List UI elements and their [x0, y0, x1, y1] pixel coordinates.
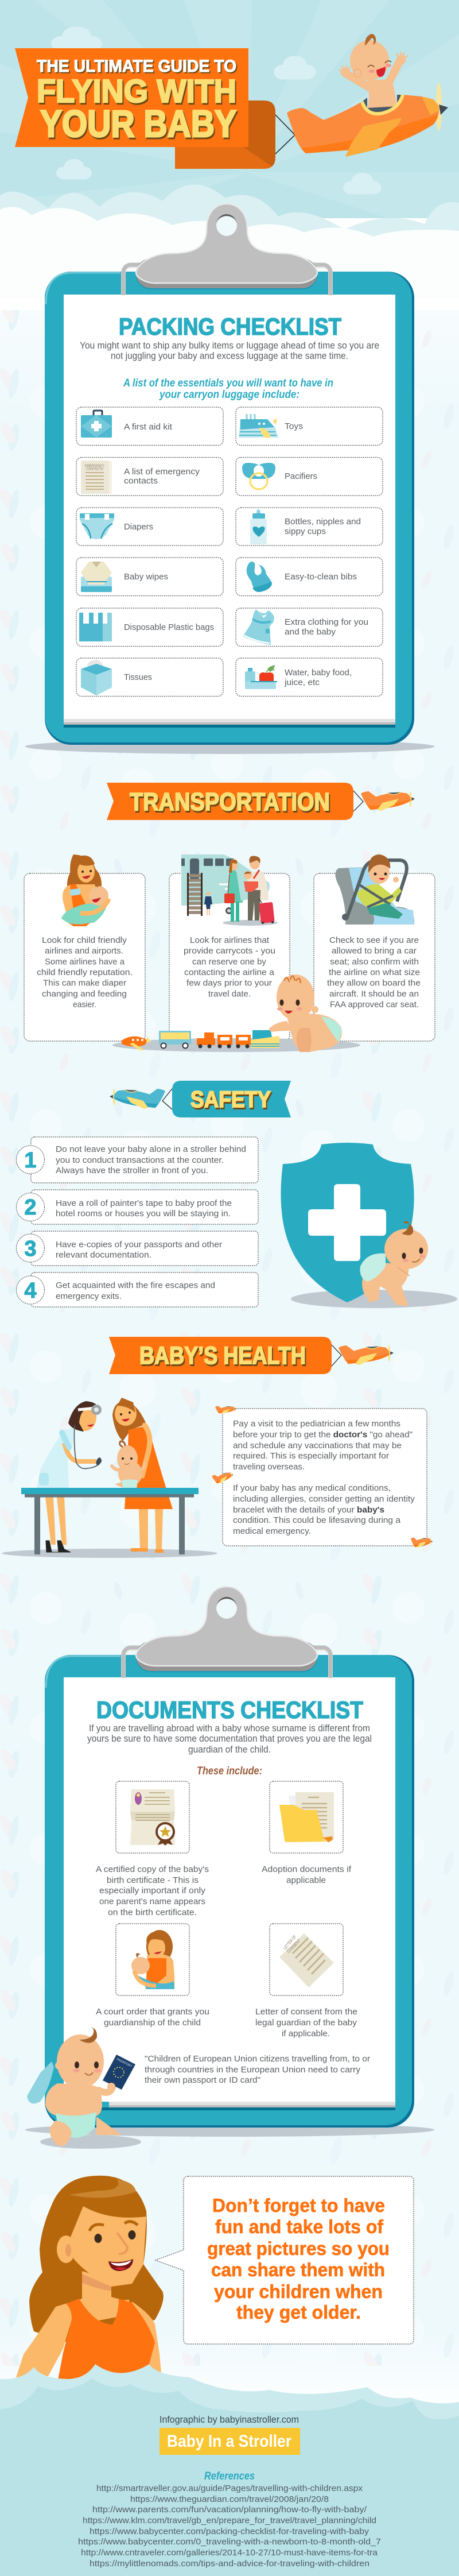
sky background [0, 0, 459, 356]
speech text: can share them with [211, 2259, 385, 2280]
illustration: mother feeding baby [61, 854, 109, 926]
safety item 2: Have a roll of painter's tape to baby proof the [56, 1198, 232, 1208]
doc card text: letter: Letter of consent from the [255, 2007, 357, 2017]
safety item 2: hotel rooms or houses you will be staying in. [56, 1209, 231, 1219]
health text box: before your trip to get the doctor's "go ahead" [233, 1430, 413, 1440]
doc card text: court order: A court order that grants you [96, 2007, 209, 2017]
fringe highlight [69, 2179, 136, 2198]
item: bibs [236, 558, 383, 596]
number badge 3: 3 [24, 1237, 37, 1261]
safety item 1: you to conduct transactions at the counter. [56, 1155, 224, 1165]
mother in teal [224, 859, 243, 922]
logo badge [160, 2428, 300, 2455]
tow lines and plane: transportation [353, 791, 415, 811]
icon: folder [279, 1792, 334, 1842]
card: child friendly airlines: easier. [73, 1000, 96, 1009]
hand [107, 2083, 115, 2091]
heading: packing checklist: PACKING CHECKLIST [119, 313, 341, 340]
card: child friendly airlines: changing and feeding [42, 989, 127, 999]
speech text: great pictures so you [207, 2238, 390, 2259]
head [57, 2035, 104, 2088]
card: car seat: the airline on what size [329, 968, 420, 977]
passport [103, 2055, 135, 2090]
icon: letter: CONSENT [286, 1938, 302, 1954]
illustration: family at airplane [181, 854, 278, 926]
toy train [197, 1032, 251, 1046]
item: water and food: juice, etc [284, 678, 320, 687]
heading: documents checklist: DOCUMENTS CHECKLIST [96, 1696, 363, 1723]
european union quote: their own passport or ID card" [145, 2075, 260, 2085]
speech bubble [155, 2176, 414, 2344]
safety item 3: relevant documentation. [56, 1250, 151, 1260]
baby on table [112, 1441, 145, 1492]
european union quote: through countries in the European Union need to carry [145, 2065, 361, 2075]
doc card: letter of consent [270, 1924, 343, 1995]
icon: food and water [245, 665, 277, 689]
top cloud layers [0, 184, 459, 310]
baby face [368, 61, 391, 77]
health text box: required. This is especially important for [233, 1451, 389, 1461]
neck shadow [82, 2274, 111, 2291]
doc card text: adoption: applicable [286, 1875, 326, 1885]
references list: http://smartraveller.gov.au/guide/Pages/travelling-with-children.aspx [96, 2484, 363, 2493]
paper [64, 1677, 395, 2102]
doc card text: birth certificate: on the birth certificate. [108, 1908, 197, 1917]
doc card text: adoption [262, 1865, 352, 1885]
icon: wipes [81, 562, 112, 592]
banner: safety [172, 1081, 291, 1117]
icon: letter [279, 1933, 334, 1987]
item: pacifiers [236, 457, 383, 496]
icon: contacts paper [81, 461, 112, 494]
icon: contacts paper: EMERGENCY [85, 465, 104, 468]
title: THE ULTIMATE GUIDE TO [37, 57, 236, 76]
intro text: not juggling your baby and excess luggage at the same time. [111, 350, 348, 361]
references list: https://www.babycenter.com/0_traveling-with-a-newborn-to-8-month-old_7 [78, 2537, 381, 2547]
doc card text: birth certificate: A certified copy of the baby's [96, 1865, 209, 1874]
clip 2 [123, 1587, 330, 1689]
arm [99, 2087, 112, 2092]
icon: plastic bag [79, 613, 112, 641]
card: car seat: they allow on board the [327, 978, 421, 988]
crawling baby [269, 974, 342, 1052]
references heading: References [204, 2470, 255, 2482]
card: child friendly airlines: airlines and airports. [45, 946, 123, 956]
wing [345, 118, 401, 157]
small clouds [51, 26, 382, 195]
item: diapers [76, 508, 223, 546]
floor shadow [2, 1549, 217, 1558]
father with baby [244, 856, 269, 920]
card: child friendly airlines: Look for child friendly [42, 935, 127, 945]
banner back fold [175, 100, 275, 169]
mother [112, 1398, 173, 1553]
shadow under shield [291, 1290, 457, 1308]
safety item 3 [16, 1231, 258, 1266]
number badge 2: 2 [24, 1196, 37, 1220]
references list: https://www.babycenter.com/packing-checklist-for-traveling-with-baby [90, 2527, 369, 2536]
card: carrycots: can reserve one by [192, 957, 267, 966]
plane with baby [287, 34, 448, 157]
safety item 3: Have e-copies of your passports and other [56, 1240, 222, 1250]
doc card: court order [116, 1924, 189, 1995]
subheading: your carryon luggage include: [159, 389, 299, 401]
shadow under clipboard 1 [25, 739, 435, 754]
card: carrycots: provide carrycots - you [184, 946, 275, 956]
credit line: Infographic by babyinastroller.com [160, 2414, 299, 2425]
card: child friendly airlines: Some airlines have a [45, 957, 125, 966]
toy boat [251, 1030, 279, 1048]
item: bibs: Easy-to-clean bibs [285, 573, 357, 582]
doc card text: birth certificate: especially important if only [99, 1886, 206, 1896]
item: emergency contacts: contacts [124, 477, 158, 486]
number badge 1 [16, 1146, 45, 1174]
icon: contacts paper: CONTACTS [86, 467, 103, 471]
floor shadow under baby [40, 2135, 141, 2149]
board [45, 1655, 414, 2128]
safety item 1 [16, 1137, 258, 1183]
health text box: traveling overseas. [233, 1462, 305, 1472]
references list: http://www.cntraveler.com/galleries/2014-10-27/10-must-have-items-for-tra [81, 2548, 378, 2558]
ear [55, 2061, 63, 2070]
exam table [21, 1488, 199, 1554]
toy [27, 2061, 54, 2103]
shadow under toys [112, 1038, 360, 1052]
banner: baby's health: BABY’S HEALTH [139, 1342, 306, 1370]
illustration: mother with baby [131, 1930, 174, 1989]
item: clothing: and the baby [285, 628, 336, 637]
logo badge: Baby In a Stroller [167, 2432, 291, 2451]
arms and chest skin [16, 2271, 161, 2377]
intro text: You might want to ship any bulky items or luggage ahead of time so you are [80, 340, 379, 351]
health text box [223, 1409, 427, 1546]
health text box: and schedule any vaccinations that may be [233, 1441, 402, 1451]
brows, eyes, nose and mouth [90, 2222, 138, 2271]
card: carrycots [169, 854, 290, 1041]
card: car seat [314, 854, 435, 1041]
tow lines [275, 115, 295, 154]
health text box: bracelet with the details of your baby's [233, 1505, 384, 1515]
baby ear [353, 69, 361, 77]
doc card text: letter [255, 2007, 357, 2039]
baby hands [340, 52, 408, 76]
documents intro: yours be sure to have some documentation that proves you are the legal [87, 1733, 372, 1744]
item: emergency contacts [76, 457, 223, 496]
card: child friendly airlines [24, 854, 145, 1041]
speech text: they get older. [236, 2302, 361, 2323]
card: car seat: Check to see if you are [329, 935, 419, 945]
european union quote [145, 2054, 370, 2085]
item: tissues [76, 658, 223, 696]
doctor [37, 1401, 102, 1552]
icon: dress [243, 609, 274, 645]
right arm [132, 2302, 161, 2374]
documents intro: guardian of the child. [188, 1744, 271, 1755]
toy plane [122, 1036, 151, 1050]
icon: certificate [130, 1789, 175, 1846]
icon: letter: LETTER OF [282, 1934, 297, 1951]
woman at the end [16, 2176, 164, 2383]
card: car seat: seat; also confirm with [330, 957, 419, 966]
item: clothing: Extra clothing for you [285, 618, 368, 627]
item: toys: Toys [285, 422, 303, 431]
clipboard: documents checklist [45, 1655, 414, 2128]
documents intro: If you are travelling abroad with a baby whose surname is different from [89, 1723, 370, 1734]
item: clothing [236, 608, 383, 647]
references list: https://www.theguardian.com/travel/2008/jan/20/8 [130, 2494, 329, 2504]
item: emergency contacts: A list of emergency [124, 467, 200, 477]
header banner [15, 48, 275, 169]
baby arms [348, 62, 399, 89]
shadow under clipboard 2 [25, 2123, 435, 2137]
baby curl [365, 34, 376, 46]
flight attendant [204, 891, 212, 915]
title [37, 57, 236, 145]
number badge 4: 4 [24, 1279, 37, 1303]
doc card text: letter: legal guardian of the baby [255, 2018, 357, 2028]
ear [57, 2235, 75, 2263]
banner: transportation [107, 783, 353, 820]
item: plastic bags: Disposable Plastic bags [124, 623, 214, 632]
item: baby wipes [76, 558, 223, 596]
speech text: your children when [214, 2281, 383, 2302]
health text box: condition. This could be lifesaving during a [233, 1515, 401, 1525]
card: car seat: FAA approved car seat. [330, 1000, 419, 1009]
safety item 1: Always have the stroller in front of you. [56, 1166, 208, 1175]
doc card text: birth certificate [96, 1865, 209, 1917]
subheading: these include: These include: [197, 1765, 262, 1777]
red suitcase [259, 899, 275, 924]
banner: safety: SAFETY [190, 1087, 271, 1112]
title: FLYING WITH [37, 73, 236, 110]
subheading [123, 377, 333, 401]
doc card text: birth certificate: birth certificate - This is [107, 1875, 199, 1885]
face [73, 2061, 101, 2075]
item: water and food [236, 658, 383, 696]
baby by shield [360, 1221, 428, 1306]
item: diapers: Diapers [124, 523, 153, 532]
cockpit [362, 95, 403, 114]
bottom cloud layers [0, 2364, 459, 2576]
hair back [29, 2176, 164, 2343]
body [45, 2083, 102, 2116]
safety item 4 [16, 1272, 258, 1307]
doc card text: court order: guardianship of the child [104, 2018, 201, 2028]
european union quote: "Children of European Union citizens travelling from, to or [145, 2054, 370, 2064]
board [45, 272, 414, 745]
propeller [436, 83, 442, 131]
references list: https://mylittlenomads.com/tips-and-advice-for-traveling-with-children [90, 2559, 369, 2569]
safety item 1: Do not leave your baby alone in a stroller behind [56, 1144, 246, 1154]
baby with passport [27, 2027, 135, 2146]
clipboard: packing checklist [45, 272, 414, 745]
banner: transportation: TRANSPORTATION [130, 788, 330, 816]
passport: PASSPORT [116, 2057, 133, 2068]
subheading: A list of the essentials you will want to have in [123, 377, 333, 389]
icon: toy boat [239, 414, 278, 438]
baby torso [367, 79, 397, 112]
icon: diaper [80, 513, 114, 539]
safety item 4: emergency exits. [56, 1291, 122, 1301]
icon: bib [247, 562, 272, 592]
health text box: Pay a visit to the pediatrician a few months [233, 1419, 400, 1429]
speech text [207, 2195, 390, 2323]
card: carrycots: contacting the airline a [184, 968, 275, 977]
speech text: fun and take lots of [215, 2216, 384, 2237]
item: bottles [236, 508, 383, 546]
doc card: adoption documents [270, 1781, 343, 1853]
card: child friendly airlines: This can make diaper [43, 978, 126, 988]
doc card text: letter: if applicable. [282, 2029, 330, 2039]
chest [72, 2300, 132, 2326]
diaper [56, 2112, 96, 2138]
card: child friendly airlines: child friendly reputation. [37, 968, 133, 977]
doc card text: adoption: Adoption documents if [262, 1865, 352, 1874]
card: carrycots: Look for airlines that [190, 935, 270, 945]
spinner [439, 105, 448, 115]
paper [64, 295, 395, 719]
item: plastic bags [76, 608, 223, 647]
item: pacifiers: Pacifiers [285, 472, 317, 481]
number badge 1: 1 [24, 1148, 37, 1173]
item: toys [236, 407, 383, 446]
number badge 2 [16, 1193, 45, 1221]
item: bottles: sippy cups [285, 527, 326, 536]
tow lines and plane: health [332, 1345, 394, 1366]
fuselage [287, 95, 439, 153]
icon: pacifier [242, 463, 275, 489]
speech text: Don’t forget to have [212, 2195, 385, 2216]
mini planes on text box [212, 1406, 433, 1548]
safety item 4: Get acquainted with the fire escapes and [56, 1281, 215, 1290]
face [70, 2206, 146, 2287]
references list: http://www.parents.com/fun/vacation/planning/how-to-fly-with-baby/ [92, 2505, 367, 2515]
icon: bottle [250, 509, 267, 544]
banner front [15, 48, 248, 147]
safety item 2 [16, 1190, 258, 1224]
clip 1 [123, 204, 330, 306]
illustration: doctor, mother and baby [2, 1398, 217, 1558]
number badge 3 [16, 1234, 45, 1262]
hair curl [79, 2027, 97, 2043]
card: car seat: aircraft. It should be an [329, 989, 419, 999]
item: baby wipes: Baby wipes [124, 573, 168, 582]
health text box: including allergies, consider getting an identity [233, 1494, 415, 1504]
references list [78, 2484, 381, 2569]
health text box: medical emergency. [233, 1526, 311, 1536]
intro text [80, 340, 379, 361]
illustration: child in car seat [335, 854, 414, 925]
doc card text: birth certificate: one parent's name appears [99, 1897, 205, 1906]
documents intro [87, 1723, 372, 1755]
card: car seat: allowed to bring a car [332, 946, 417, 956]
number badge 4 [16, 1276, 45, 1304]
item: bottles: Bottles, nipples and [285, 517, 361, 527]
icon: first aid [81, 411, 112, 438]
banner: baby's health [109, 1337, 332, 1374]
doc card text: court order [96, 2007, 209, 2028]
orange top [57, 2299, 161, 2383]
doc card: birth certificate [116, 1781, 189, 1853]
references list: https://www.klm.com/travel/gb_en/prepare_for_travel/travel_planning/child [83, 2516, 376, 2525]
toy bus [159, 1031, 191, 1049]
tow lines and plane: safety [110, 1089, 172, 1109]
card: carrycots: few days prior to your [186, 978, 272, 988]
shield with cross [281, 1143, 414, 1302]
health text box: If your baby has any medical conditions, [233, 1483, 391, 1493]
baby head [350, 40, 389, 80]
item: water and food: Water, baby food, [285, 668, 352, 678]
foot [50, 2121, 72, 2146]
card: carrycots: travel date. [208, 989, 251, 999]
item: tissues: Tissues [124, 673, 152, 682]
item: first aid kit [76, 407, 223, 446]
title: YOUR BABY [40, 102, 236, 145]
icon: tissue box [81, 660, 112, 695]
item: first aid kit: A first aid kit [124, 423, 172, 432]
